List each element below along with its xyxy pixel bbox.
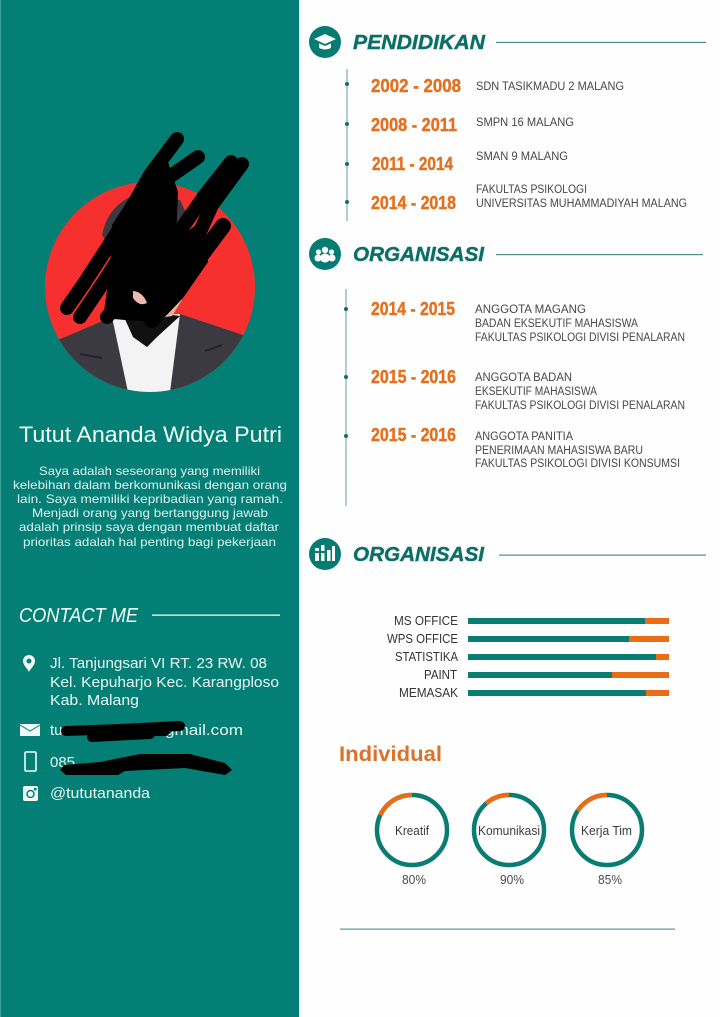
- entries: SMAN 9 MALANG: [476, 151, 568, 163]
- entries: FAKULTAS PSIKOLOGI DIVISI KONSUMSI: [475, 458, 680, 470]
- timeline: [345, 69, 349, 221]
- icon: graduation cap: [309, 26, 341, 58]
- instagram handle: @tututananda: [50, 785, 151, 802]
- contact heading: CONTACT ME: [19, 605, 139, 627]
- bar: WPS Office: [387, 632, 669, 646]
- entries: PENERIMAAN MAHASISWA BARU: [475, 445, 643, 457]
- bar: Memasak: [399, 686, 669, 700]
- profile description: Saya adalah seseorang yang memiliki: [39, 464, 260, 478]
- ring: Kreatif 80%: [377, 795, 447, 887]
- ring: Kerja Tim 85%: Kerja Tim: [581, 824, 632, 838]
- entries: FAKULTAS PSIKOLOGI: [476, 184, 587, 196]
- timeline: [344, 289, 348, 506]
- profile description: Menjadi orang yang bertanggung jawab: [32, 506, 268, 520]
- profile description: prioritas adalah hal penting bagi pekerjaan: [23, 535, 276, 549]
- individual heading: Individual: [339, 743, 442, 766]
- phone text: 085: [50, 754, 75, 771]
- ring: Komunikasi 90%: 90%: [500, 872, 524, 887]
- ring: Kerja Tim 85%: 85%: [598, 872, 622, 887]
- icon: location pin: [23, 655, 35, 672]
- address text: Kab. Malang: [50, 692, 139, 709]
- contact: phone: [25, 752, 232, 775]
- entries: 2015 - 2016: [371, 367, 456, 387]
- profile description: [13, 464, 287, 549]
- bar: WPS Office: WPS OFFICE: [387, 632, 458, 646]
- contact: instagram: [23, 785, 151, 802]
- entries: SDN TASIKMADU 2 MALANG: [476, 81, 624, 93]
- section: skills heading: [309, 538, 706, 570]
- entries: 2011 - 2014: [372, 154, 453, 174]
- entries: BADAN EKSEKUTIF MAHASISWA: [475, 318, 638, 330]
- entries: [371, 299, 685, 470]
- icon: chart: [309, 538, 341, 570]
- entries: [371, 76, 687, 213]
- heading: ORGANISASI: [353, 244, 484, 266]
- profile description: adalah prinsip saya dengan membuat daftar: [19, 520, 279, 534]
- profile photo: [45, 139, 255, 400]
- ring charts: individual skills: [377, 795, 642, 887]
- entries: EKSEKUTIF MAHASISWA: [475, 386, 597, 398]
- icon: instagram: [23, 786, 38, 801]
- section: pendidikan: [309, 26, 706, 221]
- address text: [50, 655, 279, 709]
- entries: SMPN 16 MALANG: [476, 117, 574, 129]
- heading: ORGANISASI: [353, 544, 484, 566]
- bar: Statistika: STATISTIKA: [395, 650, 459, 664]
- contact: email: [20, 722, 243, 739]
- icon: envelope: [20, 724, 40, 736]
- bar: Paint: PAINT: [424, 668, 457, 682]
- entries: 2014 - 2015: [371, 299, 455, 319]
- ring: Komunikasi 90%: [474, 795, 544, 887]
- section: organisasi: [309, 238, 703, 506]
- entries: 2008 - 2011: [371, 115, 457, 135]
- email text: gmail.com: [165, 722, 243, 739]
- email text: tu: [50, 722, 63, 739]
- ring: Kreatif 80%: 80%: [402, 872, 426, 887]
- ring: Kreatif 80%: Kreatif: [395, 824, 429, 838]
- address text: Jl. Tanjungsari VI RT. 23 RW. 08: [50, 655, 267, 672]
- bar: Statistika: [395, 650, 669, 664]
- bar: Memasak: MEMASAK: [399, 686, 459, 700]
- redaction scribble over email: [66, 726, 180, 737]
- name: Tutut Ananda Widya Putri: [19, 422, 282, 447]
- entries: 2015 - 2016: [371, 425, 456, 445]
- bar: MS Office: MS OFFICE: [394, 614, 458, 628]
- redaction scribble over phone: [60, 754, 232, 775]
- entries: 2014 - 2018: [371, 193, 456, 213]
- address text: Kel. Kepuharjo Kec. Karangploso: [50, 674, 279, 691]
- icon: phone: [25, 752, 36, 771]
- profile description: kelebihan dalam berkomunikasi dengan orang: [13, 478, 287, 492]
- ring: Komunikasi 90%: Komunikasi: [478, 824, 540, 838]
- heading: PENDIDIKAN: [353, 32, 486, 54]
- bar chart: skills: [387, 614, 669, 700]
- entries: FAKULTAS PSIKOLOGI DIVISI PENALARAN: [475, 400, 685, 412]
- entries: UNIVERSITAS MUHAMMADIYAH MALANG: [476, 198, 687, 210]
- entries: ANGGOTA PANITIA: [475, 431, 573, 443]
- entries: ANGGOTA MAGANG: [475, 304, 586, 316]
- contact: address: [23, 655, 279, 709]
- email text: [50, 722, 243, 739]
- entries: 2002 - 2008: [371, 76, 461, 96]
- icon: people: [309, 238, 341, 270]
- entries: FAKULTAS PSIKOLOGI DIVISI PENALARAN: [475, 332, 685, 344]
- exposed skin detail: [133, 291, 147, 304]
- bar: MS Office: [394, 614, 669, 628]
- panel: left sidebar: [0, 0, 299, 1017]
- bar: Paint: [424, 668, 669, 682]
- ring: Kerja Tim 85%: [572, 795, 642, 887]
- profile description: lain. Saya memiliki kepribadian yang ramah.: [17, 492, 283, 506]
- entries: ANGGOTA BADAN: [475, 372, 572, 384]
- redaction scribble over face: [67, 139, 242, 322]
